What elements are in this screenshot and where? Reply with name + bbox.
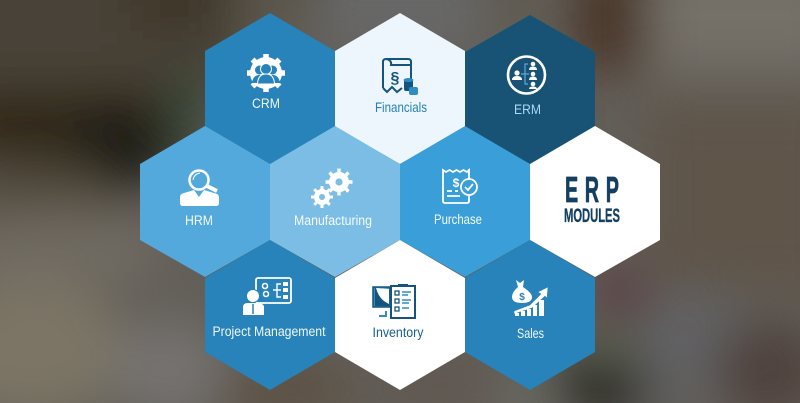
panel: Financials (335, 13, 465, 164)
icon: gear with people (247, 54, 285, 92)
panel: Purchase (400, 126, 530, 277)
icon: financial scroll and coins (383, 59, 418, 95)
label: dollar sign: $ (453, 176, 460, 190)
label: ERM: ERM (514, 102, 541, 117)
subtitle: MODULES: MODULES (564, 206, 620, 227)
icon: financial scroll and coins: § (391, 70, 400, 87)
icon: receipt with check (443, 170, 477, 203)
label: CRM: CRM (252, 96, 280, 111)
panel: ERP Modules title (530, 126, 660, 277)
panel: Manufacturing (270, 126, 400, 277)
panel: Sales (465, 240, 595, 390)
icon: person with magnifier (180, 170, 219, 206)
icon: gears (311, 168, 352, 208)
panel: Project Management (205, 240, 335, 390)
icon: money bag and rising chart: $ (519, 292, 525, 303)
panel: Inventory (335, 240, 465, 390)
label: Project Management: Project Management (212, 324, 326, 339)
icon: money bag and rising chart (512, 280, 548, 316)
panel: CRM (205, 13, 335, 164)
label: HRM: HRM (185, 213, 213, 228)
icon: presenter with board (243, 278, 291, 315)
label: Purchase: Purchase (434, 211, 482, 227)
title: ERP: ERP (565, 171, 626, 211)
panel: ERM (465, 15, 595, 164)
icon: monitor and clipboard (373, 284, 415, 318)
icon: org chart in circle (508, 56, 545, 94)
label: Financials: Financials (375, 99, 427, 115)
label: Inventory: Inventory (372, 324, 424, 340)
label: Manufacturing: Manufacturing (294, 213, 372, 228)
label: Sales: Sales (517, 325, 544, 341)
panel: HRM (140, 126, 270, 277)
